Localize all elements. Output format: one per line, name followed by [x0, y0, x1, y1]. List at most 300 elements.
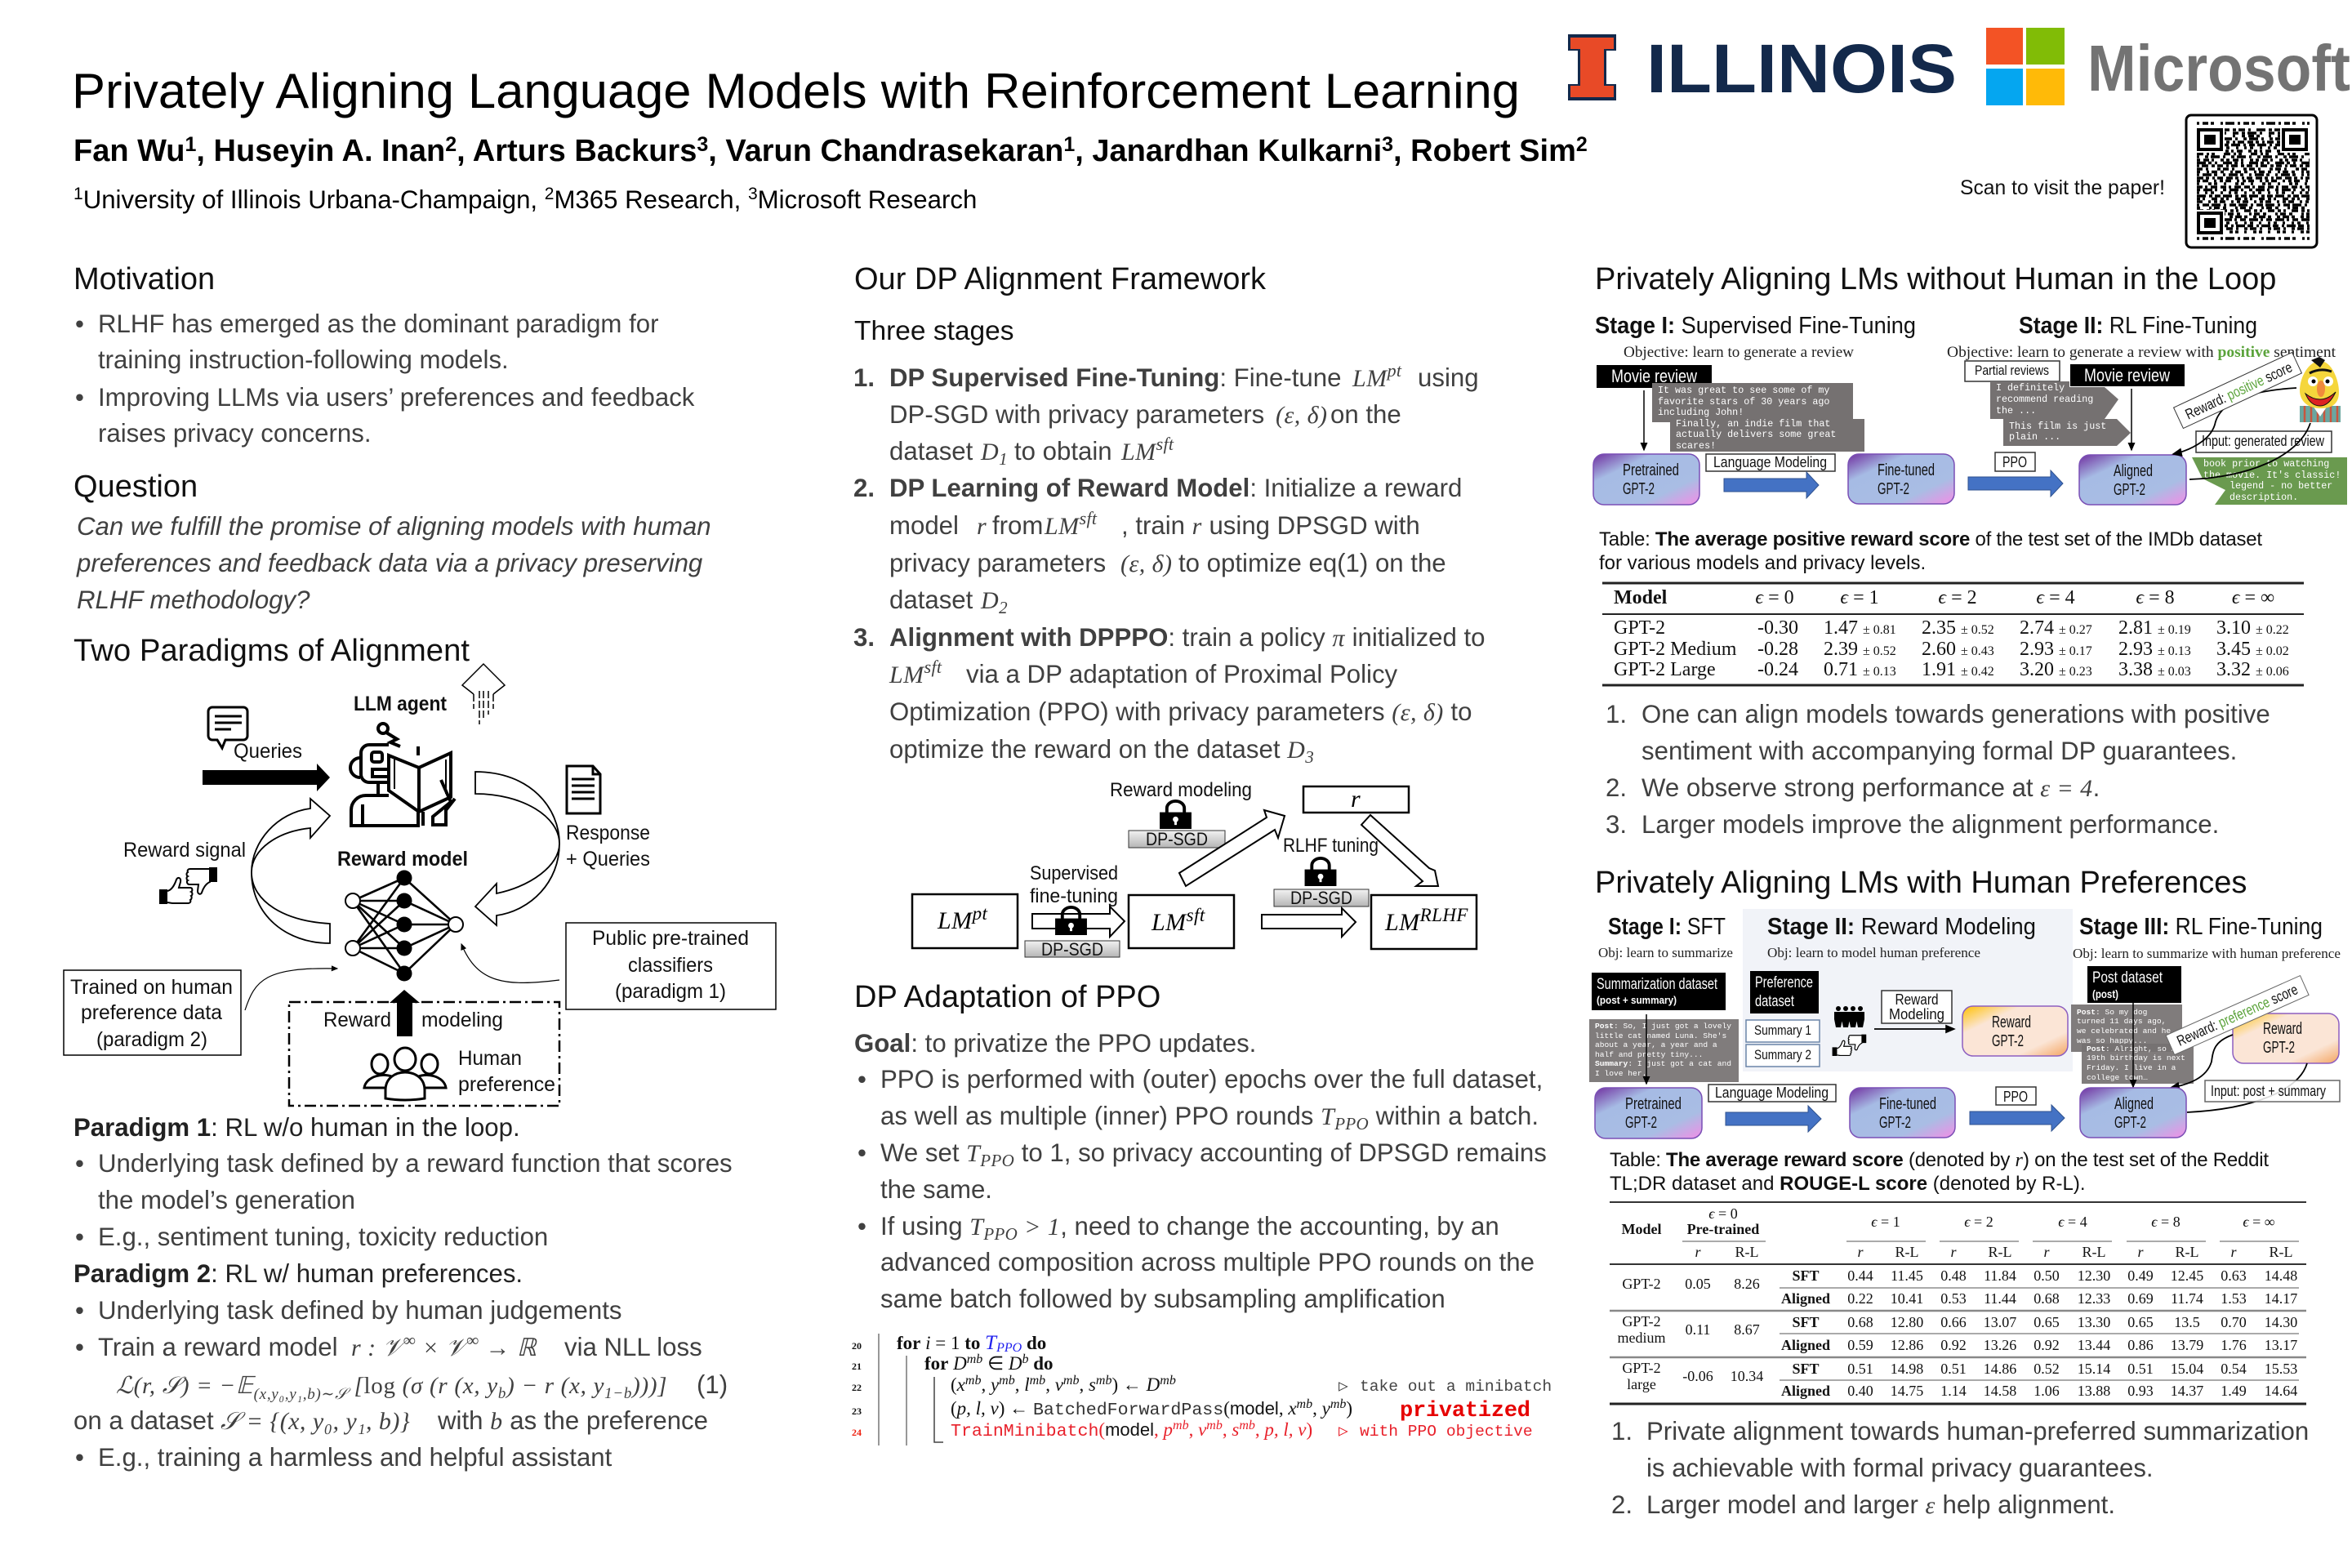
algorithm listing: (x [951, 1374, 965, 1395]
table 2: Pre-trained [1687, 1221, 1759, 1237]
table 1: 2.35 [1922, 617, 1961, 639]
curve: reward feedback [2173, 388, 2296, 454]
three stages list: r using DPSGD with [1192, 511, 1420, 540]
box: fine-tuned [1848, 454, 1954, 504]
box: r: r [1351, 786, 1361, 813]
paradigm descriptions: on a dataset [74, 1406, 214, 1435]
algorithm listing: 23 [852, 1405, 862, 1417]
three stages list: 3 [1304, 747, 1314, 767]
label: Human preference [458, 1047, 555, 1096]
paradigm descriptions: with [437, 1406, 490, 1435]
label: RLHF tuning: RLHF tuning [1283, 835, 1379, 857]
algorithm listing: , [1255, 1419, 1264, 1440]
box: LMsft [1129, 895, 1234, 948]
table 2: r [1950, 1244, 1957, 1260]
objective I: Obj: learn to summarize [1598, 945, 1733, 960]
table 2: Model [1622, 1221, 1661, 1237]
label: language modeling: Language Modeling [1715, 1085, 1829, 1101]
authors: 3 [697, 133, 708, 156]
DP adaptation text: same batch followed by subsampling amplification [880, 1285, 1446, 1313]
algorithm listing: mb [1063, 1374, 1079, 1388]
table 2 caption: Table: The average reward score (denoted by r) on the test set of the Reddit [1610, 1149, 2269, 1171]
three stages list: 1 [999, 449, 1008, 469]
callout: public classifiers: (paradigm 1) [615, 980, 726, 1003]
three stages list: dataset [889, 437, 973, 466]
stage III title: Stage III: RL Fine-Tuning [2079, 914, 2323, 940]
badge: preference dataset: Preference [1755, 974, 1813, 991]
note: post 2: Post: Alright, so my [2087, 1045, 2180, 1054]
three stages list: DP Supervised Fine-Tuning: Fine-tune [889, 363, 1341, 392]
box: reward GPT-2: GPT-2 [1992, 1032, 2024, 1050]
heading: Motivation: Motivation [74, 262, 215, 296]
algorithm listing: privatized [1400, 1399, 1530, 1423]
table 1: ± 0.17 [2059, 644, 2092, 658]
three stages list: sft [924, 657, 942, 677]
findings list 1: 3. [1606, 810, 1627, 839]
paradigm descriptions: ℒ(r, 𝒮) = −𝔼 [116, 1373, 253, 1399]
table 2: 0.49 [2127, 1267, 2154, 1284]
DP adaptation text: PPO [1334, 1114, 1369, 1134]
scan caption: Scan to visit the paper! [1960, 176, 2165, 199]
label: input generated review [2196, 431, 2332, 452]
findings list 2: Private alignment towards human-preferred summarization [1646, 1417, 2309, 1446]
table 2: 0.54 [2221, 1361, 2247, 1377]
table 1: GPT-2 Medium [1614, 639, 1737, 660]
table 1: ± 0.06 [2256, 665, 2289, 679]
heading: with human preferences: Privately Aligning LMs with Human Preferences [1595, 866, 2247, 900]
table 1: 3.38 [2118, 659, 2158, 680]
authors: , Huseyin A. Inan [196, 134, 445, 168]
label: Supervised fine-tuning [1030, 862, 1118, 907]
box: pretrained: Pretrained [1625, 1095, 1682, 1113]
arrow: reward modeling [390, 990, 420, 1036]
authors: , Arturs Backurs [457, 134, 697, 168]
table 2: 11.45 [1891, 1267, 1923, 1284]
findings list 1: We observe strong performance at ε = 4. [1642, 773, 2100, 802]
label: Supervised fine-tuning: fine-tuning [1030, 885, 1118, 907]
findings list 2 [1611, 1417, 2309, 1519]
table 2: GPT-2 [1622, 1276, 1661, 1292]
table 1 caption: for various models and privacy levels. [1599, 552, 1926, 574]
note: generated review: book prior to watching [2203, 458, 2329, 470]
box: pretrained [1593, 454, 1699, 505]
note: review 1: favorite stars of 30 years ago [1658, 396, 1829, 408]
algorithm listing: PPO [996, 1341, 1022, 1355]
box: aligned [2079, 455, 2186, 505]
box: pretrained: GPT-2 [1623, 480, 1655, 498]
badge: preference dataset [1750, 971, 1819, 1013]
heading: framework: Our DP Alignment Framework [854, 262, 1267, 296]
arrow: post to aligned [2132, 1003, 2134, 1087]
callout: public classifiers [566, 923, 776, 1009]
authors: Fan Wu [74, 134, 185, 168]
algorithm listing: mb [1239, 1419, 1255, 1432]
box: LMRLHF: LM [1385, 909, 1420, 936]
icon: lock [1305, 858, 1336, 886]
table 2 [1610, 1202, 2306, 1404]
table 2: 10.41 [1891, 1290, 1923, 1307]
icon: thumbs [1833, 1035, 1866, 1055]
box: LMpt: pt [971, 903, 988, 924]
three stages list: 2 [999, 598, 1008, 617]
table 2: 12.45 [2171, 1267, 2203, 1284]
table 2: Aligned [1781, 1290, 1830, 1307]
algorithm listing: do [1022, 1333, 1046, 1353]
box: pretrained: Pretrained [1623, 461, 1679, 479]
curve: to reward model [2189, 423, 2310, 479]
subheading: three stages: Three stages [854, 316, 1014, 346]
algorithm listing: , [1312, 1398, 1322, 1419]
QR code [2186, 115, 2317, 247]
table 2: ϵ = ∞ [2243, 1214, 2275, 1230]
label: Reward modeling: modeling [421, 1009, 503, 1031]
three stages list: pt [1386, 360, 1402, 381]
paradigm descriptions: )))] [630, 1373, 667, 1399]
algorithm listing: mb [965, 1374, 981, 1388]
algorithm listing: l [1024, 1374, 1030, 1395]
table 1: 2.74 [2020, 617, 2059, 639]
DP adaptation text: as well as multiple (inner) PPO rounds T [880, 1102, 1334, 1130]
algorithm listing: s [1089, 1374, 1096, 1395]
box: r [1303, 786, 1409, 813]
table 2: 0.48 [1940, 1267, 1967, 1284]
DP adaptation text: within a batch. [1369, 1102, 1539, 1130]
table 1: GPT-2 Large [1614, 659, 1716, 680]
table 2: 0.93 [2127, 1383, 2154, 1399]
table 2: R-L [2082, 1244, 2105, 1260]
badge: summarization dataset [1592, 973, 1726, 1010]
table 2: 13.07 [1984, 1314, 2016, 1330]
thin arrow: paradigm 2 [245, 969, 337, 1010]
box: reward GPT-2 right: Reward [2263, 1020, 2302, 1038]
arrow: to LMsft [1032, 906, 1125, 937]
table 2: 13.17 [2265, 1337, 2297, 1353]
table 2: 0.69 [2127, 1290, 2154, 1307]
table 1: ± 0.52 [1961, 623, 1994, 637]
algorithm listing: 24 [852, 1427, 862, 1438]
title: Privately Aligning Language Models with Reinforcement Learning [72, 64, 1520, 118]
algorithm listing [852, 1332, 1552, 1446]
algorithm listing: D [1146, 1374, 1160, 1395]
box: aligned: Aligned [2114, 462, 2153, 480]
DP adaptation text [854, 1029, 1547, 1313]
table 2: GPT-2 [1622, 1313, 1661, 1330]
motivation bullets: raises privacy concerns. [98, 419, 372, 448]
motivation bullets: • [75, 310, 84, 338]
algorithm listing: ▷ [1339, 1423, 1348, 1441]
table 2: 14.98 [1891, 1361, 1923, 1377]
affiliations: University of Illinois Urbana-Champaign, [83, 185, 545, 214]
dashed box: human preference [289, 1002, 559, 1106]
table 2: 0.53 [1940, 1290, 1967, 1307]
algorithm listing: mb [1160, 1374, 1176, 1388]
paradigm descriptions: • [75, 1333, 84, 1361]
three stages list: via a DP adaptation of Proximal Policy [966, 660, 1398, 688]
label: reward modeling: Reward [1895, 991, 1939, 1008]
algorithm listing: v [1055, 1374, 1064, 1395]
question text: Can we fulfill the promise of aligning models with human [77, 512, 711, 541]
table 2: 0.70 [2221, 1314, 2247, 1330]
motivation bullets: • [75, 383, 84, 412]
three stages list: LM [1120, 439, 1157, 466]
table 2: 0.11 [1686, 1321, 1710, 1338]
table 2: 0.50 [2034, 1267, 2060, 1284]
three stages list: 3. [853, 623, 875, 652]
note: partial review 1: recommend reading [1996, 394, 2093, 405]
table 2: SFT [1792, 1267, 1820, 1284]
authors: , Robert Sim [1393, 134, 1576, 168]
note: post and summary: Post: So, I just got a lovely [1595, 1022, 1731, 1031]
note: review 2: actually delivers some great [1676, 429, 1836, 440]
table 1: 1.91 [1922, 659, 1961, 680]
table 2: 14.48 [2265, 1267, 2297, 1284]
table 2: 1.53 [2221, 1290, 2247, 1307]
table 2: 8.26 [1734, 1276, 1760, 1292]
stage II title: Stage II: RL Fine-Tuning [2019, 313, 2257, 339]
table 1: GPT-2 [1614, 617, 1665, 639]
paradigm descriptions: E.g., sentiment tuning, toxicity reduction [98, 1223, 548, 1251]
algorithm listing: take out a minibatch [1360, 1378, 1552, 1396]
paradigm descriptions: 1−b [604, 1385, 632, 1402]
note: post 2: college town… [2087, 1073, 2148, 1082]
table 2: 12.80 [1891, 1314, 1923, 1330]
note: post and summary [1589, 1019, 1739, 1082]
paradigm descriptions [74, 1113, 733, 1472]
DP adaptation text: • [858, 1138, 866, 1167]
box: reward GPT-2 [1962, 1006, 2068, 1056]
icon: up arrow [462, 664, 505, 724]
algorithm listing: for i = 1 to T [897, 1332, 996, 1354]
three stages list: privacy parameters [889, 549, 1106, 577]
DP adaptation text: to 1, so privacy accounting of DPSGD remains [1014, 1138, 1547, 1167]
paradigm descriptions: Paradigm 2: RL w/ human preferences. [74, 1259, 523, 1288]
paradigm descriptions: → ℝ [479, 1334, 537, 1361]
table 2: 0.52 [2034, 1361, 2060, 1377]
three stages list: DP-SGD with privacy parameters [889, 400, 1264, 429]
callout: trained on human preference data: Trained on human [70, 976, 233, 999]
three stages list: on the [1330, 400, 1401, 429]
table 1: 3.32 [2216, 659, 2256, 680]
table 2: r [2230, 1244, 2237, 1260]
badge: post dataset [2087, 966, 2181, 1003]
table 1 [1602, 583, 2304, 685]
authors: 3 [1382, 133, 1393, 156]
callout: trained on human preference data: preference data [81, 1001, 222, 1024]
three stages list: Alignment with DPPPO: train a policy π initialized to [889, 623, 1486, 652]
DP adaptation text: PPO is performed with (outer) epochs over the full dataset, [880, 1065, 1543, 1094]
paradigm descriptions: the model’s generation [98, 1186, 355, 1214]
table 1: ± 0.13 [1863, 665, 1896, 679]
box: fine-tuned: Fine-tuned [1878, 461, 1935, 479]
table 1: 2.93 [2020, 639, 2059, 660]
heading: without human: Privately Aligning LMs without Human in the Loop [1595, 262, 2276, 296]
table 2: r [2137, 1244, 2144, 1260]
table 1: ± 0.22 [2256, 623, 2289, 637]
table 2: 14.75 [1891, 1383, 1923, 1399]
label: Response + Queries: + Queries [566, 848, 650, 871]
label: Reward modeling: Reward [323, 1009, 391, 1031]
table 1: ± 0.27 [2059, 623, 2092, 637]
diagram: with human preferences [1589, 909, 2341, 1138]
table 1: -0.30 [1757, 617, 1798, 639]
table 1: ± 0.43 [1961, 644, 1994, 658]
note: post 1: Post: So my dog [2077, 1008, 2147, 1017]
paradigm descriptions: [ [348, 1373, 364, 1399]
label: Supervised fine-tuning: Supervised [1030, 862, 1118, 884]
table 2: 1.49 [2221, 1383, 2247, 1399]
table 2: large [1627, 1376, 1656, 1392]
box: pretrained: GPT-2 [1625, 1114, 1657, 1132]
arrow: language modeling [1724, 472, 1819, 498]
objective II: Objective: learn to generate a review with positive sentiment [1947, 344, 2336, 361]
motivation bullets: training instruction-following models. [98, 345, 509, 374]
box: LMsft: sft [1187, 905, 1205, 925]
table 1: 3.20 [2020, 659, 2059, 680]
table 2: R-L [1895, 1244, 1919, 1260]
table 1: 2.60 [1922, 639, 1961, 660]
question text [76, 512, 711, 614]
algorithm listing: , [1045, 1374, 1055, 1395]
algorithm listing: mb [999, 1374, 1015, 1388]
note: post 2: 19th birthday is next [2087, 1054, 2185, 1062]
arrow: response [475, 772, 559, 925]
table 2: 14.30 [2265, 1314, 2297, 1330]
affiliations: 2 [545, 185, 554, 203]
note: partial review 1: the ... [1996, 405, 2036, 416]
table 2: -0.06 [1682, 1368, 1713, 1384]
table 2: 0.68 [2034, 1290, 2060, 1307]
DP adaptation text: Goal: to privatize the PPO updates. [854, 1029, 1256, 1058]
table 2: 10.34 [1731, 1368, 1763, 1384]
findings list 1: 2. [1606, 773, 1627, 802]
three stages list: (ε, δ) [1120, 550, 1172, 577]
table 2: 0.86 [2127, 1337, 2154, 1353]
authors: 2 [445, 133, 457, 156]
three stages list [853, 360, 1486, 767]
table 2: 12.33 [2078, 1290, 2110, 1307]
note: post 1: was so happy... [2077, 1036, 2147, 1045]
note: post and summary: about a year, a year and a [1595, 1040, 1717, 1049]
table 1: Model [1614, 587, 1668, 608]
label: PPO [1995, 452, 2035, 471]
callout: public classifiers: classifiers [628, 954, 713, 977]
algorithm listing: y [1321, 1398, 1331, 1419]
table 2: r [1857, 1244, 1864, 1260]
paradigm descriptions: Underlying task defined by a reward function that scores [98, 1149, 733, 1178]
note: partial review 2: This film is just [2009, 421, 2106, 432]
arrow: movie review to aligned [2131, 389, 2132, 450]
findings list 1: Larger models improve the alignment performance. [1642, 810, 2219, 839]
arrow: r to LMRLHF [1361, 815, 1438, 886]
table 2: 14.86 [1984, 1361, 2016, 1377]
icon: Bert [2300, 357, 2341, 422]
table 2: SFT [1792, 1361, 1820, 1377]
DP adaptation text: , need to change the accounting, by an [1060, 1212, 1499, 1241]
algorithm listing: v [1198, 1419, 1207, 1440]
algorithm listing: b [1022, 1352, 1028, 1366]
table 2: 11.44 [1984, 1290, 2016, 1307]
icon: lock [1160, 801, 1192, 829]
note: generated review: legend - no better [2230, 480, 2332, 492]
algorithm listing: , [1189, 1419, 1198, 1440]
table 2: 1.06 [2034, 1383, 2060, 1399]
table 2: 15.04 [2171, 1361, 2203, 1377]
badge: movie review: Movie review [2084, 365, 2170, 385]
authors: 2 [1576, 133, 1588, 156]
table 2: ϵ = 2 [1964, 1214, 1993, 1230]
table 2: 0.22 [1847, 1290, 1873, 1307]
three stages list: DP Learning of Reward Model: Initialize a reward [889, 474, 1462, 502]
paradigm descriptions: b [498, 1385, 506, 1402]
arrow: to reward model [1874, 1028, 1954, 1030]
table 2 caption: TL;DR dataset and ROUGE-L score (denoted by R-L). [1610, 1173, 2086, 1195]
motivation bullets: RLHF has emerged as the dominant paradigm for [98, 310, 658, 338]
three stages list: sft [1156, 434, 1174, 454]
paradigm descriptions: • [75, 1296, 84, 1325]
heading: Two Paradigms: Two Paradigms of Alignment [74, 634, 470, 668]
table 2: 12.30 [2078, 1267, 2110, 1284]
algorithm listing: y [989, 1374, 1000, 1395]
objective I: Objective: learn to generate a review [1624, 344, 1854, 361]
table 1: ± 0.42 [1961, 665, 1994, 679]
scroll: summary 2 [1746, 1045, 1820, 1067]
note: post and summary: little cat named Luna. She's [1595, 1031, 1726, 1040]
note: partial review 1 [1990, 381, 2118, 419]
table 2: 0.40 [1847, 1383, 1873, 1399]
panel: middle column [852, 262, 1552, 1446]
label: partial reviews: Partial reviews [1975, 363, 2049, 378]
table 2: 0.59 [1847, 1337, 1873, 1353]
label: reward positive score: Reward: positive score [2183, 359, 2295, 423]
curve: reward feedback [2171, 1035, 2233, 1088]
three stages list: from [992, 511, 1050, 540]
algorithm listing: D [1008, 1353, 1022, 1374]
box: fine-tuned: GPT-2 [1878, 480, 1909, 498]
table 2: ϵ = 4 [2058, 1214, 2087, 1230]
scroll: summary 1 [1746, 1020, 1820, 1042]
paradigm descriptions: • [75, 1443, 84, 1472]
note: post 1: turned 11 days ago, [2077, 1017, 2166, 1026]
algorithm listing: (p, l, v) ← BatchedForwardPass(model, x [951, 1398, 1297, 1420]
label: input generated review: Input: generated review [2202, 433, 2325, 449]
table 2: 0.65 [2034, 1314, 2060, 1330]
table 2: GPT-2 [1622, 1360, 1661, 1376]
icon: robot reading [350, 724, 455, 826]
heading: Question: Question [74, 470, 198, 504]
label: reward modeling: Modeling [1889, 1006, 1944, 1022]
table 2: R-L [1988, 1244, 2012, 1260]
paradigm descriptions: ) − r (x, y [505, 1373, 604, 1399]
badge: post dataset: Post dataset [2092, 969, 2163, 987]
arrow: to LMRLHF [1262, 908, 1356, 937]
badge: movie review: Movie review [1611, 366, 1697, 386]
box: reward GPT-2 right: GPT-2 [2263, 1039, 2295, 1057]
table 1 caption [1599, 528, 2262, 574]
panel: right column [1589, 262, 2347, 1519]
table 2: 0.44 [1847, 1267, 1873, 1284]
algorithm listing: s [1232, 1419, 1239, 1440]
icon: document [567, 766, 600, 813]
algorithm listing: for D [924, 1353, 967, 1374]
table 2: 0.51 [1940, 1361, 1967, 1377]
table 2: R-L [1735, 1244, 1759, 1260]
table 1: ϵ = 0 [1755, 587, 1794, 608]
three stages list: model [889, 511, 959, 540]
label: language modeling: Language Modeling [1713, 454, 1827, 470]
table 2: 0.92 [2034, 1337, 2060, 1353]
note: partial review 1: I definitely [1996, 382, 2065, 394]
label: PPO: PPO [2002, 454, 2027, 470]
